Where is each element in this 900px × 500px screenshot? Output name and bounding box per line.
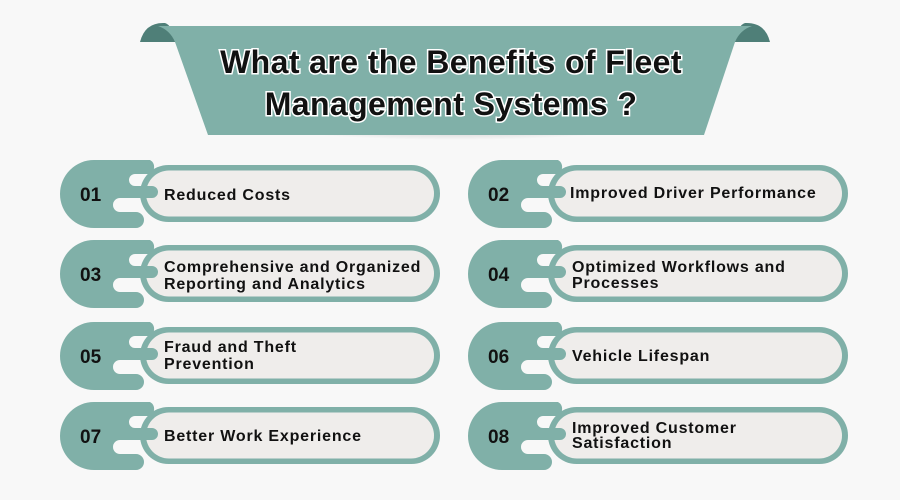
item 05 xyxy=(60,322,440,390)
item 07: 07 xyxy=(80,427,101,448)
item 02 xyxy=(468,160,848,228)
item 05: Fraud and Theft xyxy=(164,339,297,356)
title text: What are the Benefits of Fleet xyxy=(220,44,682,80)
item 05: Prevention xyxy=(164,356,255,373)
item 01: Reduced Costs xyxy=(164,187,291,204)
title banner xyxy=(140,23,770,135)
item 04: Processes xyxy=(572,275,659,292)
item 04: 04 xyxy=(488,265,510,286)
item 08: Satisfaction xyxy=(572,435,672,452)
item 08: 08 xyxy=(488,427,509,448)
item 04: Optimized Workflows and xyxy=(572,259,786,276)
item 08 xyxy=(468,402,848,470)
item 03: Comprehensive and Organized xyxy=(164,259,421,276)
item 02: 02 xyxy=(488,185,509,206)
item 06: 06 xyxy=(488,347,509,368)
item 07: Better Work Experience xyxy=(164,428,362,445)
item 03: 03 xyxy=(80,265,101,286)
title line 2: Management Systems ? xyxy=(265,86,637,122)
item 03: Reporting and Analytics xyxy=(164,276,366,293)
item 06: Vehicle Lifespan xyxy=(572,348,710,365)
item 01 xyxy=(60,160,440,228)
item 04 xyxy=(468,240,848,308)
item 08: Improved Customer xyxy=(572,420,737,437)
banner shadow xyxy=(235,118,675,162)
item 05: 05 xyxy=(80,347,102,368)
item 06 xyxy=(468,322,848,390)
item 03 xyxy=(60,240,440,308)
item 01: 01 xyxy=(80,185,102,206)
item 02: Improved Driver Performance xyxy=(570,185,817,202)
item 07 xyxy=(60,402,440,470)
